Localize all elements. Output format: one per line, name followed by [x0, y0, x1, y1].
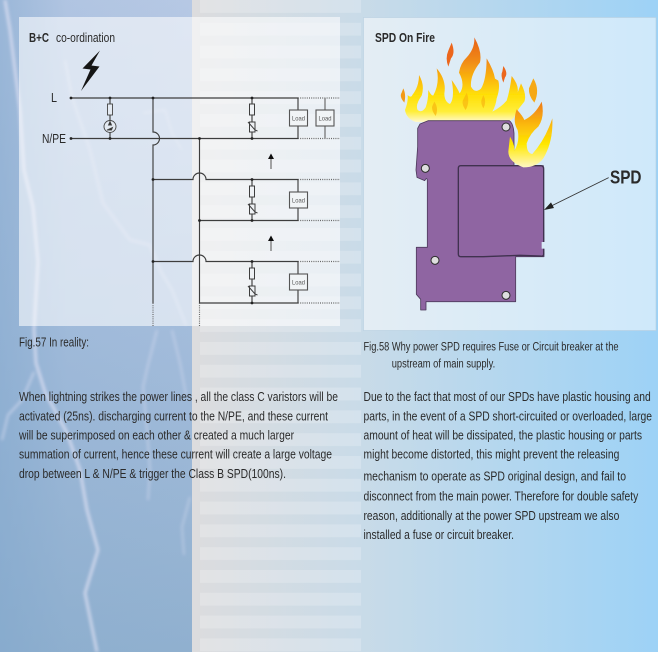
- module notch: [542, 242, 545, 249]
- heading: B+C co-ordination: B+C: [29, 31, 49, 45]
- panel: SPD On Fire: [364, 18, 656, 330]
- label: SPD: SPD: [610, 168, 642, 188]
- front module: [458, 166, 544, 257]
- class C fuses and varistors: [248, 104, 258, 296]
- text block: fuse explanation: [364, 389, 652, 542]
- text block: lightning explanation: will be superimposed on each other & created a much larger: [18, 428, 295, 442]
- line labels: [42, 91, 66, 146]
- icon: lightning bolt: [81, 50, 100, 91]
- line labels: L: [51, 91, 57, 105]
- caption: Fig.58: upstream of main supply.: [392, 358, 495, 370]
- text block: lightning explanation: activated (25ns). discharging current to the N/PE, and these current: [19, 408, 328, 423]
- caption: Fig.58: [364, 342, 618, 370]
- text block: lightning explanation: When lightning strikes the power lines , all the class C varistors will be: [19, 389, 338, 404]
- junction dots: [70, 97, 253, 304]
- line labels: N/PE: [42, 132, 66, 146]
- panel: B+C co-ordination circuit: [19, 17, 340, 326]
- wiring: [71, 98, 340, 326]
- load boxes: Load: [292, 198, 305, 204]
- text block: lightning explanation: summation of current, hence these current will create a large voltage: [19, 447, 332, 462]
- load boxes: Load: [318, 116, 332, 122]
- SPD pointer arrow: [544, 178, 609, 210]
- text block: lightning explanation: drop between L & N/PE & trigger the Class B SPD(100ns).: [19, 466, 286, 481]
- caption: Fig.57: Fig.57 In reality:: [19, 336, 89, 350]
- load boxes: [290, 110, 334, 290]
- heading: B+C co-ordination: co-ordination: [56, 31, 115, 45]
- side flame: [508, 102, 552, 167]
- mounting screws: [421, 123, 510, 299]
- small flame licks: [401, 43, 537, 103]
- text block: fuse explanation: installed a fuse or circuit breaker.: [364, 527, 514, 542]
- heading: B+C co-ordination: [29, 31, 115, 45]
- arrows: upward current: [268, 154, 274, 251]
- heading: SPD On Fire: SPD On Fire: [375, 31, 435, 45]
- device housing: [416, 121, 544, 310]
- flames on top: [401, 37, 537, 122]
- SPD device with flames: [401, 37, 609, 310]
- load boxes: Load: [292, 280, 305, 286]
- class B fuse and spark gap: [104, 104, 116, 132]
- circuit diagram: [42, 91, 340, 326]
- inner flame tongues: [432, 93, 485, 116]
- load boxes: Load: [292, 116, 305, 122]
- text block: lightning explanation: [18, 389, 338, 481]
